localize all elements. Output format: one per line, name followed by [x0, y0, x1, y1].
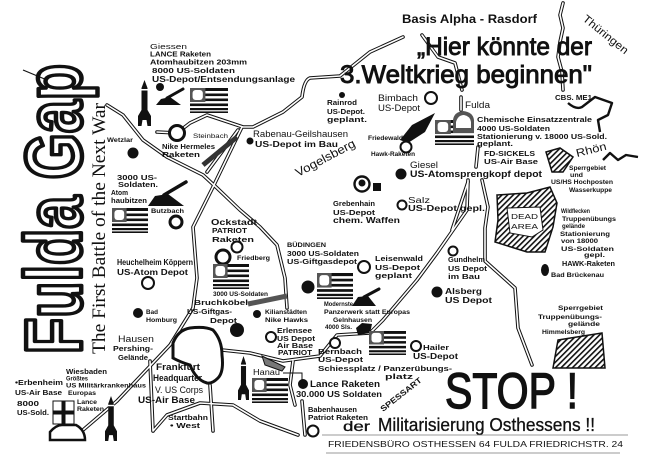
label: Friedewald Hawk: Friedewald [368, 136, 403, 142]
flag Butzbach [112, 208, 148, 233]
label: Giesel: Giesel [410, 160, 438, 170]
label: Rainrod: Rainrod [327, 100, 357, 107]
label: Leisenwald: geplant [375, 273, 413, 280]
label: Modernste [324, 302, 411, 316]
label: Chemische Einsatzzentrale: 4000 US-Soldaten [477, 126, 550, 133]
label: Rabenau: Rabenau-Geilshausen [253, 129, 348, 139]
label: Kilianstädten: Nike Hawks [265, 318, 309, 324]
icon: skull Büdingen [302, 280, 314, 294]
headline: 3.Weltkrieg beginnen" [340, 61, 592, 89]
icon: Friedberg marks [216, 242, 242, 264]
icon: Rainrod dot [339, 92, 345, 98]
label: Rabenau: US-Depot im Bau [255, 140, 338, 149]
icon: rocket Giessen [138, 80, 151, 126]
flag Fulda [435, 111, 474, 145]
label: Rainrod: US-Depot. [327, 109, 365, 116]
icon: Wetzlar dot [128, 148, 138, 158]
label: Sperrgebiet Wasserkuppe [551, 166, 613, 194]
label: Wiesbaden [66, 369, 147, 397]
label: Sperrgebiet Wasserkuppe: Wasserkuppe [569, 188, 613, 194]
label: Giessen: Giessen [150, 44, 187, 51]
label: Babenhausen [308, 407, 368, 422]
hatched area: dead area: DEAD [511, 214, 538, 221]
label: Ockstadt: Raketen [212, 237, 254, 244]
label: Wetzlar: Wetzlar [107, 138, 134, 144]
label: FD-Sickels: FD-SICKELS [484, 151, 535, 158]
hatched area: dead area [495, 187, 557, 252]
label: Lance Raketen small [77, 400, 104, 413]
label: Grebenhain: US-Depot [333, 210, 376, 217]
icon: Köppern ring [142, 277, 154, 289]
label: Sperrgebiet Himmelsberg [538, 306, 603, 336]
flag Gelnhausen [369, 331, 406, 355]
label: Butzbach: Butzbach [151, 209, 184, 215]
icon: Butzbach blob [170, 216, 182, 228]
label: Bimbach: Bimbach [378, 93, 418, 103]
label: Sperrgebiet Wasserkuppe: und [570, 173, 583, 179]
label: Basis Alpha: Basis Alpha - Rasdorf [402, 12, 538, 26]
label: Nike Hermeles: Nike Hermeles [162, 144, 215, 151]
label: Nike Hermeles [162, 144, 215, 159]
headline [340, 33, 592, 89]
label: Giesel [410, 160, 542, 179]
label: Hailer [413, 345, 458, 361]
label: Frankfurt: Headquarter [153, 373, 202, 383]
label: Frankfurt: US-Air Base [138, 395, 195, 405]
label: Grebenhain [333, 201, 400, 225]
icon: tank Butzbach [148, 182, 186, 206]
label: FD-Sickels [484, 151, 538, 166]
label: FD-Sickels: US-Air Base [484, 159, 538, 166]
label: Alsberg: US Depot [445, 296, 492, 305]
label: Fulda: Fulda [465, 100, 490, 110]
label: Büdingen: 3000 US-Soldaten [287, 251, 359, 258]
label: Heilerheim: Heuchelheim Köppern [117, 258, 193, 267]
label: Heilerheim [117, 258, 193, 277]
hatched blob Hanau [262, 356, 285, 371]
label: 3000 US-Soldaten Friedberg: 3000 US-Soldaten [213, 292, 268, 298]
label: Rainrod [327, 100, 367, 124]
label: Friedewald Hawk [368, 136, 415, 158]
label: Lance Raketen small: Raketen [77, 407, 104, 413]
label: Hausen: Pershing- [113, 346, 154, 353]
label: Wildflecken: Wildflecken [561, 209, 590, 215]
label: Erlensee: US Depot [277, 336, 316, 343]
label: Ockstadt: PATRIOT [212, 228, 248, 235]
label: Friedberg: Friedberg [237, 256, 270, 262]
footer address: FRIEDENSBÜRO OSTHESSEN 64 FULDA FRIEDRICHSTR. 24 [328, 439, 623, 449]
label: Giessen: Atomhaubitzen 203mm [150, 60, 247, 66]
label: Babenhausen: Patriot Raketen [308, 415, 368, 422]
label: Bernbach: platz [385, 374, 414, 381]
hatched area: Rhön [546, 148, 573, 172]
headline: „Hier könnte der [417, 33, 592, 61]
label: Vogelsberg: Vogelsberg [293, 136, 358, 180]
label: Modernste: Modernste [324, 302, 354, 308]
label: Sperrgebiet Himmelsberg: Sperrgebiet [558, 306, 603, 312]
label: Hausen [113, 334, 154, 362]
label: Frankfurt [138, 362, 203, 405]
label: Hausen: Gelände [118, 355, 148, 362]
label: Büdingen: BÜDINGEN [287, 242, 326, 249]
label: Gelnhausen: Gelnhausen [333, 318, 372, 324]
label: Wiesbaden: Wiesbaden [66, 369, 107, 376]
label: Frankfurt: V. US Corps [155, 385, 203, 395]
icon: Nike missile [203, 137, 237, 165]
label: Friedewald Hawk: Hawk-Raketen [371, 152, 415, 158]
icon: skull Grebenhain [354, 176, 381, 192]
label: Grebenhain: Grebenhain [333, 201, 375, 208]
flag Friedberg [213, 264, 249, 289]
icon: Lance dot [298, 379, 308, 389]
label: Büdingen: US-Giftgasdepot [287, 259, 358, 266]
label: Bernbach: Schiessplatz / Panzerübungs- [318, 366, 453, 373]
label: Hausen: Hausen [118, 334, 154, 344]
label: Wildflecken: gelände [562, 224, 586, 230]
label: Bruchköbel: Bruchköbel [194, 300, 248, 307]
label: 3000 US-Soldaten Atomhaubitzen: haubitzen [111, 198, 147, 205]
label: Kilianstädten: Kilianstädten [265, 310, 307, 316]
label: Leisenwald: Leisenwald [375, 256, 423, 263]
label: Chemische Einsatzzentrale [477, 117, 607, 148]
label: 8000 US-Sold.: US-Sold. [17, 410, 49, 417]
label: Wildflecken: Stationierung [560, 232, 610, 238]
label: Rhön: Rhön [575, 141, 608, 160]
label: Hailer: Hailer [423, 345, 449, 352]
label: Bad Homburg: Homburg [146, 318, 177, 324]
label: Startbahn West [168, 415, 208, 430]
label: Wildflecken: US-Soldaten [561, 247, 614, 253]
icon: rocket Hanau [238, 356, 249, 400]
flag Büdingen [317, 273, 353, 299]
label: Grebenhain: chem. Waffen [333, 216, 400, 225]
icon: Steinbach blob [170, 126, 184, 140]
label: Erlensee: PATRIOT [278, 350, 313, 357]
icon: Alsberg dot [432, 286, 442, 298]
label: CBS: CBS. ME1 [555, 95, 592, 102]
label: Rabenau [253, 129, 348, 149]
label: Lance Raketen: 30.000 US Soldaten [296, 390, 382, 399]
label: Sperrgebiet Wasserkuppe: Sperrgebiet [569, 166, 606, 172]
label: Giessen: 8000 US-Soldaten [152, 68, 235, 75]
icon: Bad Homburg dot [133, 308, 143, 318]
label: Wiesbaden: US Militärkrankenhaus [66, 384, 147, 390]
label: Giessen: LANCE Raketen [150, 52, 211, 58]
label: Wildflecken: gepl. [584, 253, 605, 259]
label: Giessen: US-Depot/Entsendungsanlage [152, 75, 296, 84]
label: Wiesbaden: Größtes [66, 376, 89, 382]
label: Alsberg [445, 287, 492, 305]
label: Gelnhausen [325, 318, 372, 331]
label: STOP: STOP ! [445, 363, 578, 419]
icon: Kilianstädten dot [253, 310, 261, 318]
label: 3000 US-Soldaten Atomhaubitzen: Atom [111, 190, 128, 197]
label: Startbahn West: Startbahn [168, 415, 208, 422]
label: Heilerheim: US-Atom Depot [117, 268, 188, 277]
label: Gundhelm: im Bau [448, 274, 480, 281]
icon: tank Giessen [156, 83, 183, 105]
label: Wiesbaden: Europas [68, 391, 97, 397]
CBS and Rhön border line [568, 97, 638, 160]
label: Spessart: SPESSART [379, 376, 424, 414]
label: Salz: US-Depot gepl. [408, 204, 485, 213]
label: Leisenwald [375, 256, 423, 280]
label: Gundhelm [448, 257, 488, 281]
icon: Fulda rocket [400, 113, 435, 143]
icon: Bernbach ring [330, 338, 340, 348]
icon: Gundhelm ring [448, 246, 458, 256]
icon: tank Gelnhausen [352, 289, 379, 306]
icon: Friedewald ring [400, 142, 412, 152]
label: Lance Raketen small: Lance [77, 400, 98, 406]
label: Sperrgebiet Wasserkuppe: US/HS Hochposten [551, 180, 613, 186]
label: Nike Hermeles: Raketen [162, 152, 200, 159]
label: Sperrgebiet Himmelsberg: gelände [568, 322, 601, 328]
Frankfurt area [173, 327, 222, 383]
label: Salz: Salz [408, 196, 430, 205]
label: Bruchköbel: Depot [210, 318, 238, 325]
icon: Bruchköbel missile [248, 296, 287, 304]
label: Lance Raketen [296, 379, 382, 399]
label: Erlensee: Erlensee [277, 328, 312, 335]
label: Bernbach: US-Depot [318, 357, 364, 364]
label: Sperrgebiet Himmelsberg: Truppenübungs- [538, 315, 602, 321]
flag Hanau [252, 378, 288, 403]
label: Thüringen: Thüringen [580, 13, 630, 57]
label: Bad Brückenau: Bad Brückenau [551, 273, 604, 279]
label: Wildflecken: Truppenübungs [562, 217, 617, 223]
label: 3000 US-Soldaten Atomhaubitzen: 3000 US- [117, 175, 158, 182]
label: 8000 US-Sold.: 8000 [17, 401, 39, 408]
label: Salz [408, 196, 485, 213]
label: Erbenheim: US-Air Base [15, 390, 62, 397]
label: Erbenheim [15, 380, 63, 397]
label: Bad Homburg [146, 310, 177, 324]
icon: Giesel dot [396, 168, 406, 180]
icon: rocket bottom left [105, 396, 117, 441]
label: Steinbach: Steinbach [193, 134, 228, 140]
icon: Leisenwald ring [358, 261, 370, 273]
icon: Gelnhausen blob [356, 323, 372, 335]
icon: Salz ring [398, 200, 406, 210]
label: Chemische Einsatzzentrale: Stationierung v. 18000 US-Sold. [477, 134, 607, 141]
label: Hailer: US-Depot [413, 352, 458, 361]
label: Bernbach [318, 349, 453, 381]
label: 8000 US-Sold. [17, 401, 49, 417]
label: Bimbach [378, 93, 421, 113]
label: Bad Homburg: Bad [146, 310, 158, 316]
label: Erbenheim: •Erbenheim [15, 380, 63, 387]
label: der Militarisierung Osthessens: Militarisierung Osthessens !! [378, 415, 595, 435]
label: Giessen [150, 44, 296, 84]
label: Bruchköbel [187, 300, 248, 325]
label: Erlensee [277, 328, 316, 357]
label: Bruchköbel: US-Giftgas- [187, 309, 233, 316]
label: 3000 US-Soldaten Atomhaubitzen: Soldaten. [118, 182, 158, 189]
icon: Bad Brückenau dot [541, 264, 549, 276]
arrow: Hanau to Lance [283, 373, 302, 380]
label: Babenhausen: Babenhausen [308, 407, 357, 414]
label: Rainrod: geplant. [327, 117, 367, 124]
label: Lance Raketen: Lance Raketen [310, 379, 380, 389]
flag Giessen [190, 88, 228, 113]
label: Modernste: Panzerwerk statt Europas [324, 310, 411, 316]
label: Alsberg: Alsberg [445, 287, 482, 296]
hatched area: dead area: AREA [511, 224, 538, 231]
label: Ockstadt [211, 218, 257, 244]
icon: Erlensee ring [266, 332, 276, 342]
subtitle: The First Battle of the Next War [89, 102, 110, 354]
label: Gundhelm: US Depot [448, 266, 488, 273]
icon: cross flag on blob [50, 401, 85, 440]
label: Bernbach: Bernbach [318, 349, 362, 356]
label: Chemische Einsatzzentrale: Chemische Einsatzzentrale [477, 117, 592, 124]
road network [83, 3, 563, 435]
label: Wildflecken: von 18000 [561, 239, 599, 245]
icon: Rabenau dot [246, 138, 254, 144]
label: Bimbach: US-Depot [378, 103, 421, 113]
label: Sperrgebiet Himmelsberg: Himmelsberg [542, 330, 585, 336]
icon: skull Bruchköbel [230, 323, 244, 337]
label: Startbahn West: • West [170, 423, 201, 430]
label: Erlensee: Air Base [277, 343, 313, 350]
label: Kilianstädten [265, 310, 309, 324]
icon: Babenhausen ring [308, 426, 318, 436]
label: Ockstadt: Ockstadt [211, 218, 257, 227]
label: Leisenwald: US-Depot [375, 265, 421, 272]
pointer line by title [23, 70, 47, 80]
label: Wildflecken [560, 209, 617, 268]
label: Frankfurt: Frankfurt [156, 362, 200, 372]
label: Chemische Einsatzzentrale: geplant. [477, 141, 513, 148]
hatched area: Himmelsberg [553, 333, 605, 368]
label: Gundhelm: Gundhelm [448, 257, 485, 264]
icon: Bimbach ring [425, 92, 437, 104]
label: Gelnhausen: 4000 Sls. [325, 325, 352, 331]
label: Büdingen [287, 242, 359, 266]
label: Wildflecken: HAWK-Raketen [562, 261, 615, 268]
icon: Hailer ring [411, 341, 421, 351]
label: Hanau: Hanau [253, 368, 280, 377]
label: Giesel: US-Atomsprengkopf depot [410, 169, 542, 179]
label: 3000 US-Soldaten Atomhaubitzen [111, 175, 158, 205]
label: der Militarisierung Osthessens: der [343, 418, 370, 434]
